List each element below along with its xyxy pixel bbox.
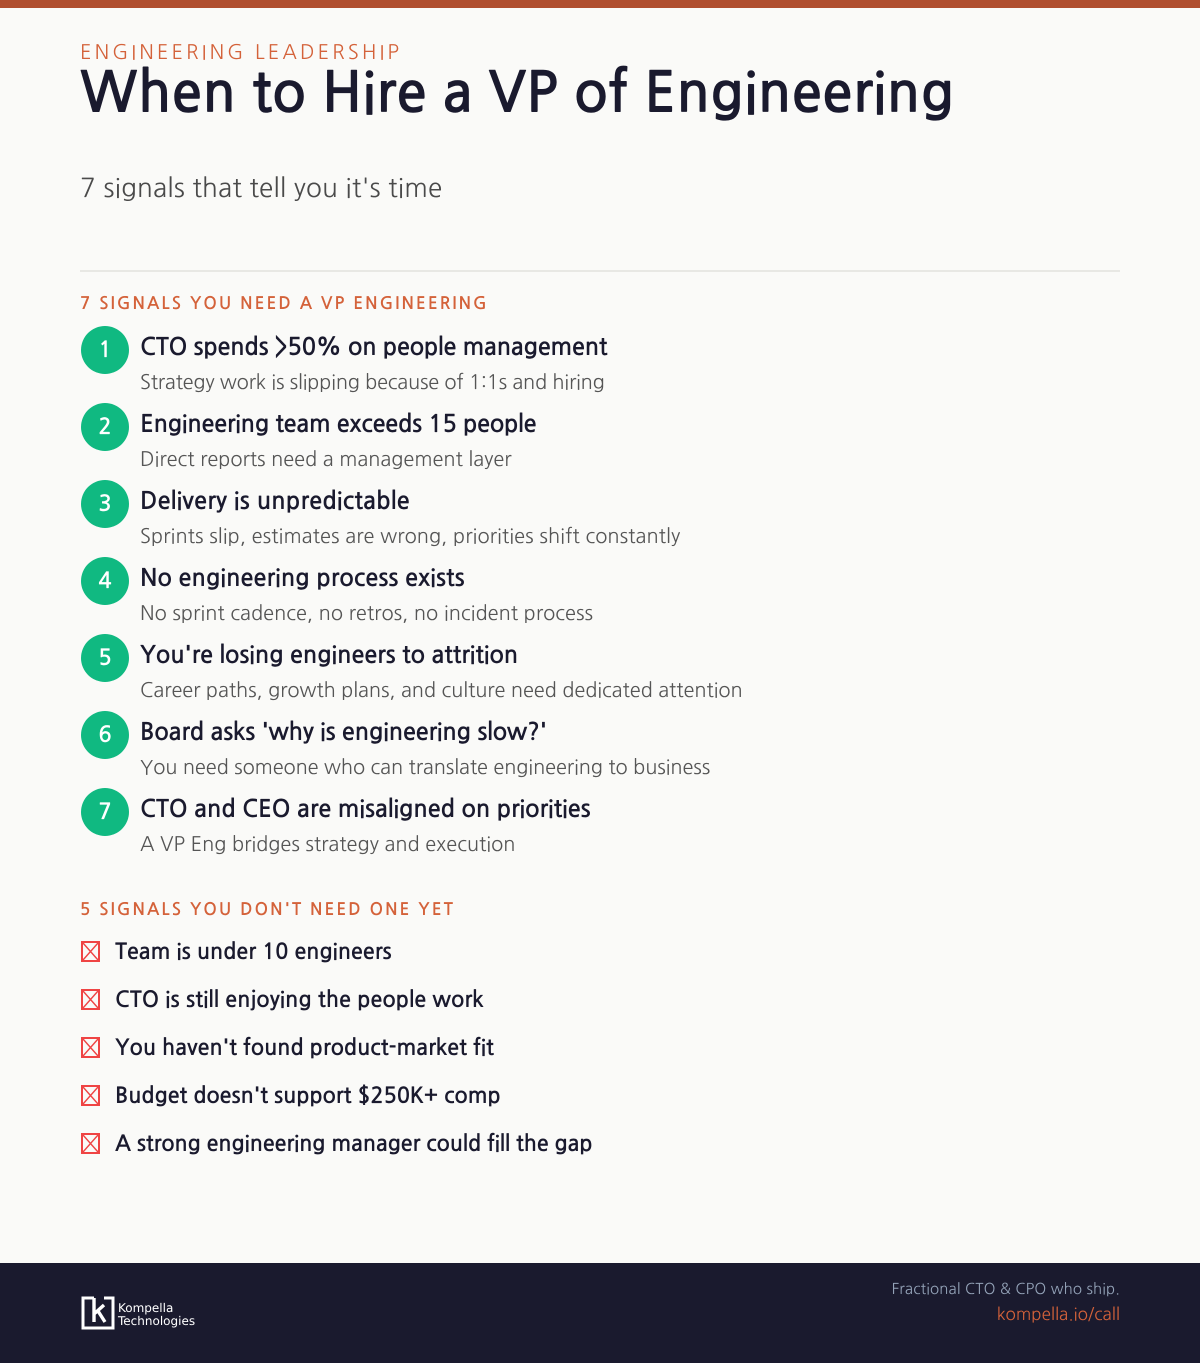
signal 7: [81, 788, 590, 854]
signal 4: No sprint cadence, no retros, no incident process: [140, 603, 593, 623]
signal 2: 2: [98, 416, 112, 438]
signal 4: [81, 557, 593, 623]
signal 7: CTO and CEO are misaligned on priorities: [140, 797, 590, 821]
signal 1: CTO spends >50% on people management: [140, 335, 607, 359]
signal 1: 1: [98, 339, 112, 361]
signal 5: You're losing engineers to attrition: [140, 643, 518, 667]
signal 6: [81, 711, 710, 778]
footer: [0, 1263, 1200, 1363]
signal 2: Direct reports need a management layer: [140, 449, 512, 469]
top accent bar: [0, 0, 1200, 8]
item 2: CTO is still enjoying the people work: [115, 989, 484, 1011]
item 5: A strong engineering manager could fill the gap: [115, 1133, 592, 1155]
signal 1: Strategy work is slipping because of 1:1s and hiring: [140, 372, 605, 392]
section heading: signals you don't need: 5 SIGNALS YOU DON'T NEED ONE YET: [80, 901, 455, 918]
signal 6: Board asks 'why is engineering slow?': [140, 720, 547, 744]
signal 2: [81, 403, 536, 470]
signal 6: You need someone who can translate engineering to business: [140, 757, 710, 777]
signal 5: [81, 634, 743, 700]
section heading: signals you need: 7 SIGNALS YOU NEED A VP ENGINEERING: [80, 295, 489, 312]
signal 5: 5: [98, 647, 112, 669]
signal 1: [81, 326, 608, 392]
item 4: Budget doesn't support $250K+ comp: [115, 1085, 501, 1107]
signal 3: Delivery is unpredictable: [140, 489, 410, 513]
link: kompella.io/call: [997, 1306, 1120, 1323]
signal 5: Career paths, growth plans, and culture need dedicated attention: [140, 680, 743, 700]
signal 4: 4: [98, 570, 112, 592]
subtitle: 7 signals that tell you it's time: [80, 175, 442, 201]
item 3: You haven't found product-market fit: [115, 1037, 494, 1059]
title: When to Hire a VP of Engineering: [80, 66, 954, 121]
signal 7: 7: [98, 801, 112, 823]
signal 2: Engineering team exceeds 15 people: [140, 412, 536, 436]
item 1: Team is under 10 engineers: [115, 941, 392, 963]
logo text: [118, 1301, 195, 1328]
logo text: Kompella: [118, 1301, 173, 1315]
signal 4: No engineering process exists: [140, 566, 465, 590]
signal 3: [81, 480, 680, 546]
signal 3: 3: [98, 493, 112, 515]
signal 6: 6: [98, 724, 112, 746]
signal 7: A VP Eng bridges strategy and execution: [140, 834, 515, 854]
logo text: Technologies: [118, 1314, 195, 1328]
tagline: Fractional CTO & CPO who ship.: [892, 1282, 1120, 1297]
logo mark: [82, 1296, 114, 1330]
eyebrow label: ENGINEERING LEADERSHIP: [80, 42, 402, 62]
signal 3: Sprints slip, estimates are wrong, priorities shift constantly: [140, 526, 680, 546]
